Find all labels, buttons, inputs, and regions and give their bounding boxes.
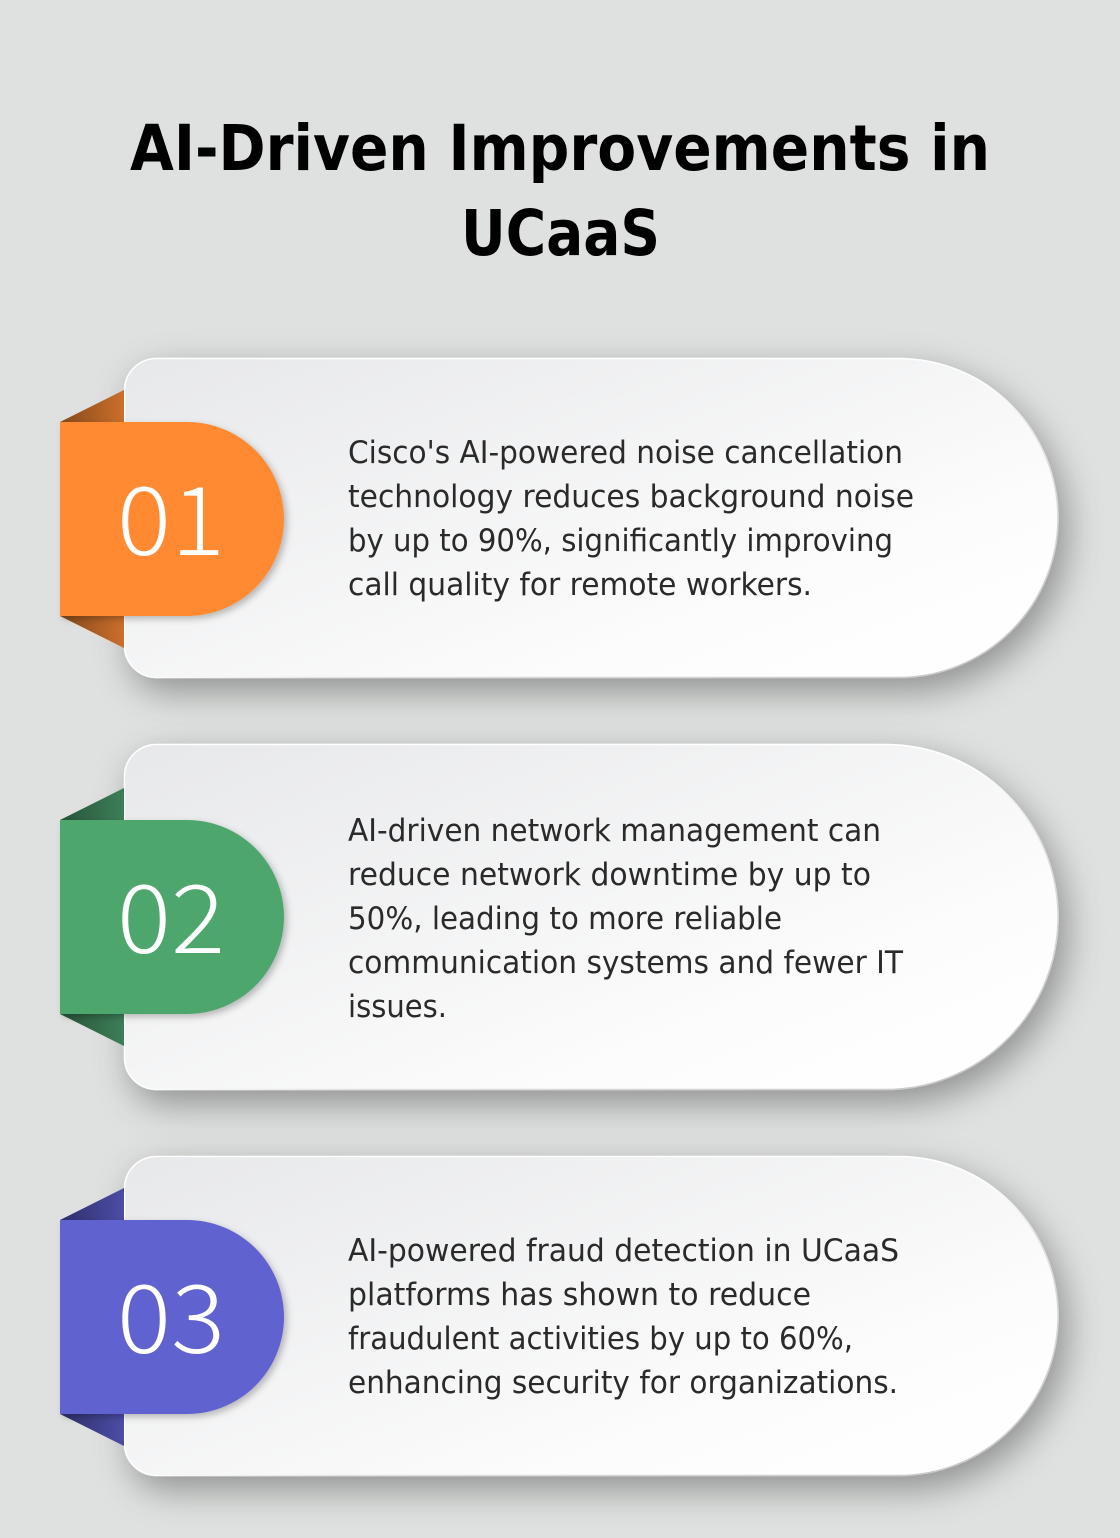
text 01 <box>348 435 914 603</box>
text 01: call quality for remote workers. <box>348 567 812 603</box>
text 02 <box>348 813 904 1025</box>
card 01 <box>124 358 1058 678</box>
text 03: AI-powered fraud detection in UCaaS <box>348 1233 899 1269</box>
text 02: issues. <box>348 989 447 1025</box>
number 03: 03 <box>117 1244 225 1381</box>
text 01: technology reduces background noise <box>348 479 914 515</box>
card 03 <box>124 1156 1058 1476</box>
number badge 01 <box>60 422 284 616</box>
text 02: communication systems and fewer IT <box>348 945 904 981</box>
panel: step 03 <box>60 1156 1058 1476</box>
title: AI-Driven Improvements in <box>130 112 990 185</box>
ribbon fold bottom 02 <box>60 1014 124 1046</box>
ribbon fold top 03 <box>60 1188 124 1220</box>
number 02: 02 <box>117 844 225 981</box>
number badge 03 <box>60 1220 284 1414</box>
text 02: 50%, leading to more reliable <box>348 901 782 937</box>
text 02: AI-driven network management can <box>348 813 881 849</box>
title: UCaaS <box>461 197 660 270</box>
text 03: platforms has shown to reduce <box>348 1277 811 1313</box>
text 03: fraudulent activities by up to 60%, <box>348 1321 853 1357</box>
text 01: by up to 90%, significantly improving <box>348 523 893 559</box>
number badge 02 <box>60 820 284 1014</box>
ribbon fold top 01 <box>60 390 124 422</box>
text 03: enhancing security for organizations. <box>348 1365 898 1401</box>
ribbon fold bottom 01 <box>60 616 124 648</box>
ribbon fold bottom 03 <box>60 1414 124 1446</box>
card 02 <box>124 744 1058 1090</box>
text 02: reduce network downtime by up to <box>348 857 871 893</box>
panel: step 02 <box>60 744 1058 1090</box>
panel: step 01 <box>60 358 1058 678</box>
ribbon fold top 02 <box>60 788 124 820</box>
text 03 <box>348 1233 899 1401</box>
text 01: Cisco's AI-powered noise cancellation <box>348 435 903 471</box>
title <box>130 112 990 270</box>
number 01: 01 <box>117 446 225 583</box>
